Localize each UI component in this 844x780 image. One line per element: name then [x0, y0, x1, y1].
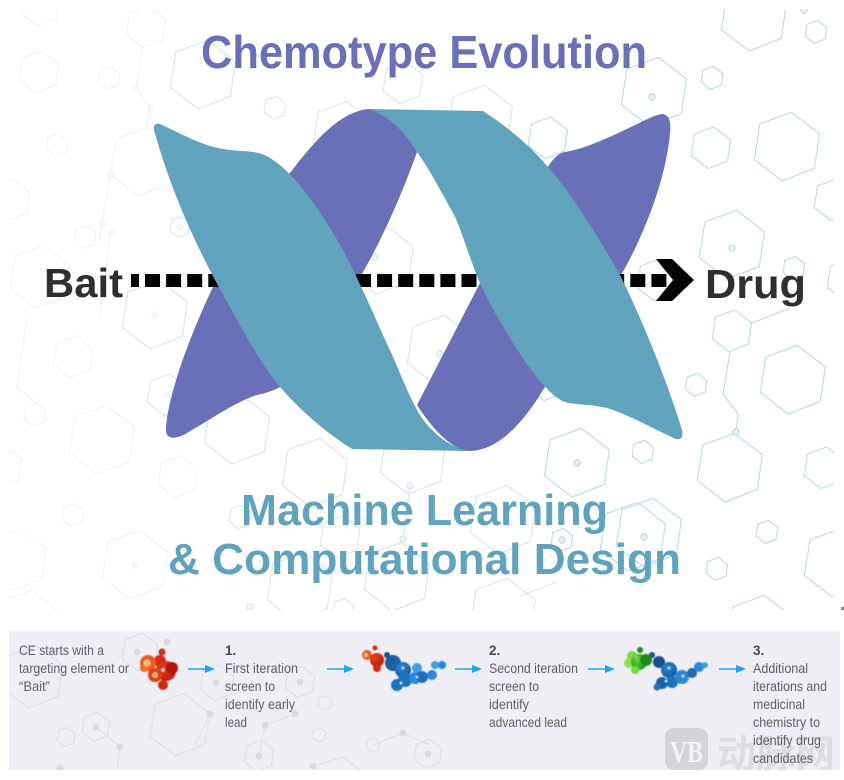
text: step 2 [489, 643, 578, 730]
arrow 4 [588, 665, 615, 673]
watermark: VB [670, 734, 703, 769]
text: bait intro [19, 642, 129, 694]
helix: purple strands, dashed arrow and teal strands [131, 109, 694, 451]
text: step 1: 1. [225, 643, 236, 658]
text: step 2: identify [489, 696, 529, 712]
text: step 3: Additional [753, 660, 808, 676]
text: step 2: advanced lead [489, 714, 567, 730]
icon: advanced lead molecule [624, 647, 708, 690]
text: step 3 [753, 643, 827, 766]
label: Bait: Bait [44, 260, 123, 306]
purple strand left [166, 109, 417, 438]
subtitle: Machine Learning [241, 486, 608, 535]
text: step 1: identify early [225, 696, 295, 712]
arrow 1 [188, 665, 215, 673]
text: bait intro: targeting element or [19, 660, 129, 676]
subtitle: & Computational Design [168, 535, 681, 584]
text: step 2: 2. [489, 643, 500, 658]
text: step 3: 3. [753, 643, 764, 658]
text: step 1: screen to [225, 678, 275, 694]
panel background hexagons [3, 633, 442, 772]
corner mark [841, 607, 844, 610]
text: step 3: chemistry to [753, 714, 820, 730]
watermark: 动脉网 [717, 734, 835, 777]
text: bait intro: “Bait” [19, 678, 50, 694]
text: step 3: candidates [753, 750, 813, 766]
panel: process steps [3, 631, 840, 777]
icon: early lead molecule [362, 646, 446, 691]
text: step 1: First iteration [225, 660, 298, 676]
dashed arrow from Bait to Drug [131, 259, 694, 301]
text: step 3: iterations and [753, 678, 827, 694]
arrow 5 [719, 665, 746, 673]
teal strand right [368, 109, 682, 439]
icon: bait molecule [140, 648, 178, 690]
text: step 3: medicinal [753, 696, 805, 712]
text: step 2: Second iteration [489, 660, 578, 676]
purple strand right [417, 114, 670, 451]
text: bait intro: CE starts with a [19, 642, 104, 658]
label: Drug: Drug [705, 261, 806, 307]
text: step 3: identify drug [753, 732, 821, 748]
text: step 2: screen to [489, 678, 539, 694]
watermark [665, 728, 832, 770]
arrow 3 [455, 665, 482, 673]
subtitle [168, 486, 681, 584]
teal strand left [154, 124, 468, 451]
arrow 2 [327, 665, 354, 673]
text: step 1: lead [225, 714, 247, 730]
title: Chemotype Evolution [201, 26, 647, 78]
text: step 1 [225, 643, 298, 730]
